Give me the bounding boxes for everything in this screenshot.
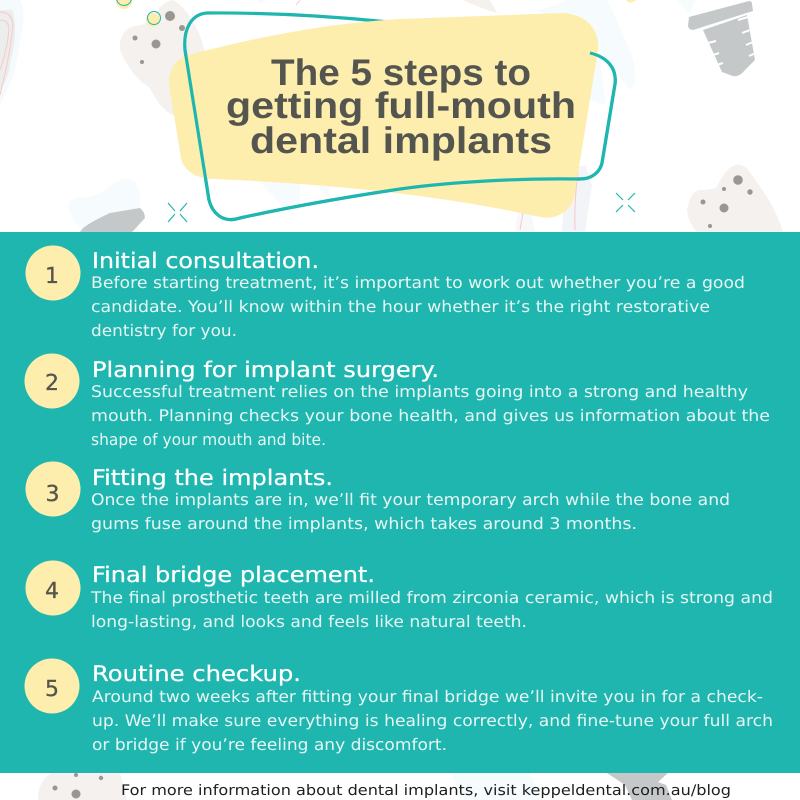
title outline back [185, 13, 615, 220]
step 5 body: Around two weeks after fitting your final bridge we’ll invite you in for a check- [92, 687, 763, 706]
step 2 body [91, 382, 770, 449]
number badge 3: 3 [46, 482, 60, 507]
step 5 heading: Routine checkup. [92, 662, 301, 687]
panel: steps [0, 232, 800, 773]
step 1 body: Before starting treatment, it’s important to work out whether you’re a good [91, 273, 745, 292]
step 3 body: Once the implants are in, we’ll fit your temporary arch while the bone and [91, 490, 730, 509]
step 1 body [91, 273, 745, 340]
title: dental implants [250, 120, 552, 161]
step 2 body: shape of your mouth and bite. [91, 430, 326, 449]
step 4 body: long-lasting, and looks and feels like natural teeth. [91, 612, 527, 631]
step 5 [24, 658, 773, 754]
step 3 body [91, 490, 730, 533]
title [226, 52, 576, 161]
step 5 body: or bridge if you’re feeling any discomfort. [92, 735, 447, 754]
title outline front [185, 50, 615, 220]
number badge 4: 4 [45, 579, 59, 604]
icon: dental implant [688, 1, 756, 76]
title: getting full-mouth [226, 85, 576, 126]
step 3 heading: Fitting the implants. [92, 466, 333, 491]
step 1 [26, 246, 745, 340]
step 4 heading: Final bridge placement. [92, 563, 375, 588]
step 5 body [92, 687, 773, 754]
number badge 5: 5 [45, 677, 59, 702]
step 4 body: The final prosthetic teeth are milled from zirconia ceramic, which is strong and [90, 588, 773, 607]
step 2 body: Successful treatment relies on the implants going into a strong and healthy [91, 382, 748, 401]
step 1 body: candidate. You’ll know within the hour whether it’s the right restorative [91, 297, 710, 316]
step 4 [26, 560, 773, 631]
number badge 5 [24, 658, 80, 714]
number badge 1 [26, 246, 80, 300]
footer note: For more information about dental implants, visit keppeldental.com.au/blog [121, 783, 731, 799]
step 5 body: up. We’ll make sure everything is healing correctly, and fine-tune your full arch [92, 711, 773, 730]
step 1 body: dentistry for you. [91, 321, 237, 340]
number badge 2: 2 [45, 371, 59, 396]
title yellow panel [169, 13, 598, 218]
step 3 [26, 462, 730, 533]
step 2 heading: Planning for implant surgery. [92, 358, 439, 383]
number badge 1: 1 [45, 264, 59, 289]
title: The 5 steps to [271, 52, 531, 93]
step 4 body [90, 588, 773, 631]
step 3 body: gums fuse around the implants, which takes around 3 months. [91, 514, 637, 533]
number badge 3 [26, 462, 80, 516]
number badge 2 [24, 354, 80, 408]
step 1 heading: Initial consultation. [92, 249, 319, 274]
step 2 [24, 354, 770, 449]
step 2 body: mouth. Planning checks your bone health, and gives us information about the [91, 406, 770, 425]
number badge 4 [26, 560, 80, 616]
